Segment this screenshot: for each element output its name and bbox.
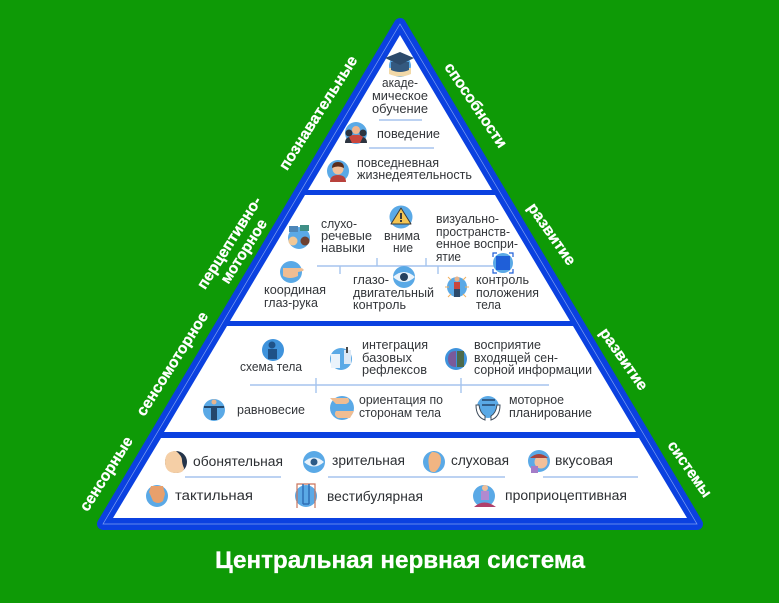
text: sensory input: входящей сен- — [474, 351, 558, 365]
icon: eye — [303, 451, 325, 473]
text: sensory input: сорной информации — [474, 363, 592, 377]
text: academic learning: акаде- — [382, 76, 418, 90]
text: gustatory: вкусовая — [555, 453, 613, 468]
text: basic reflexes: интеграция — [362, 338, 428, 352]
icon: vestibular — [295, 484, 317, 508]
text: speech skills: навыки — [321, 241, 365, 255]
label: abilities: способности — [441, 60, 510, 151]
icon: eye — [393, 266, 415, 288]
text: academic learning: мическое — [372, 89, 428, 103]
text: hand-eye coordination: глаз-рука — [264, 296, 318, 310]
text: oculomotor control: глазо- — [353, 273, 389, 287]
icon: speech faces — [288, 225, 310, 249]
icon: person — [327, 160, 349, 182]
icon: hand — [146, 485, 168, 507]
icon: nose — [165, 451, 187, 473]
text: proprioceptive: проприоцептивная — [505, 488, 627, 503]
panel: sensory systems — [113, 438, 687, 518]
text: position control: тела — [476, 298, 501, 312]
text: speech skills — [321, 217, 372, 255]
label: sensorimotor: сенсомоторное — [133, 309, 212, 419]
text: body schema: схема тела — [240, 360, 302, 374]
label: perceptual-motor: перцептивно- — [194, 194, 265, 292]
label: systems: системы — [664, 438, 715, 501]
icon: balance — [203, 399, 225, 421]
icon: reflexes — [330, 347, 352, 370]
text: hand-eye coordination — [264, 283, 326, 310]
text: basic reflexes: рефлексов — [362, 363, 427, 377]
text: oculomotor control — [353, 273, 434, 312]
icon: brain gear — [445, 348, 467, 370]
text: position control: контроль — [476, 273, 529, 287]
text: balance: равновесие — [237, 403, 305, 417]
divider — [379, 119, 422, 121]
text: body side orientation: ориентация по — [359, 393, 443, 407]
icon: taste — [528, 450, 550, 473]
text: daily living: повседневная — [357, 156, 439, 170]
text: motor planning — [509, 393, 592, 420]
icon: motor planning — [476, 396, 500, 420]
icon: attention — [390, 206, 412, 228]
text: daily living: жизнедеятельность — [357, 168, 472, 182]
text: visual: зрительная — [332, 453, 405, 468]
text: hand-eye coordination: координая — [264, 283, 326, 297]
text: visual-spatial perception: енное воспри- — [436, 237, 518, 251]
text: position control: положения — [476, 286, 539, 300]
text: academic learning: обучение — [372, 102, 428, 116]
text: speech skills: речевые — [321, 229, 372, 243]
label: development 1: развитие — [524, 200, 579, 269]
divider — [369, 147, 434, 149]
divider lines — [185, 476, 638, 478]
label: cognitive: познавательные — [276, 53, 361, 173]
icon: yoga — [473, 485, 496, 507]
chart lines — [250, 378, 549, 393]
text: speech skills: слухо- — [321, 217, 357, 231]
icon: body position — [445, 276, 469, 297]
label: development 2: развитие — [596, 325, 651, 394]
icon: pointing hand — [280, 261, 304, 283]
text: academic learning — [372, 76, 428, 116]
label: sensory: сенсорные — [77, 433, 137, 514]
panel: cognitive abilities — [308, 35, 492, 190]
icon: ear — [423, 451, 445, 473]
text: sensory input: восприятие — [474, 338, 541, 352]
text: visual-spatial perception — [436, 212, 518, 264]
text: daily living — [357, 156, 472, 182]
icon: graduation cap — [385, 52, 414, 77]
text: olfactory: обонятельная — [193, 454, 283, 469]
panel: sensorimotor — [164, 326, 636, 432]
text: tactile: тактильная — [175, 488, 253, 503]
text: basic reflexes: базовых — [362, 351, 413, 365]
text: attention — [384, 229, 420, 255]
text: position control — [476, 273, 539, 312]
text: sensory input — [474, 338, 592, 377]
text: body side orientation: сторонам тела — [359, 406, 441, 420]
text: attention: ние — [393, 241, 413, 255]
text: basic reflexes — [362, 338, 428, 377]
text: visual-spatial perception: ятие — [436, 250, 461, 264]
text: oculomotor control: двигательный — [353, 286, 434, 300]
icon: cube — [493, 253, 513, 273]
label: perceptual-motor: моторное — [217, 216, 271, 287]
icon: body schema — [262, 339, 284, 361]
pyramid outline — [103, 24, 697, 524]
title: Центральная нервная система — [215, 547, 586, 574]
text: oculomotor control: контроль — [353, 298, 406, 312]
text: auditory: слуховая — [451, 453, 509, 468]
text: behaviour: поведение — [377, 127, 440, 141]
text: visual-spatial perception: пространств- — [436, 225, 510, 239]
text: vestibular: вестибулярная — [327, 489, 423, 504]
text: motor planning: планирование — [509, 406, 592, 420]
text: motor planning: моторное — [509, 393, 564, 407]
text: body side orientation — [359, 393, 443, 420]
text: attention: внима — [384, 229, 420, 243]
icon: orientation hands — [330, 396, 354, 420]
panel: perceptual-motor — [230, 195, 570, 321]
icon: behaviour group — [345, 122, 367, 144]
chart lines — [317, 258, 497, 274]
text: visual-spatial perception: визуально- — [436, 212, 499, 226]
